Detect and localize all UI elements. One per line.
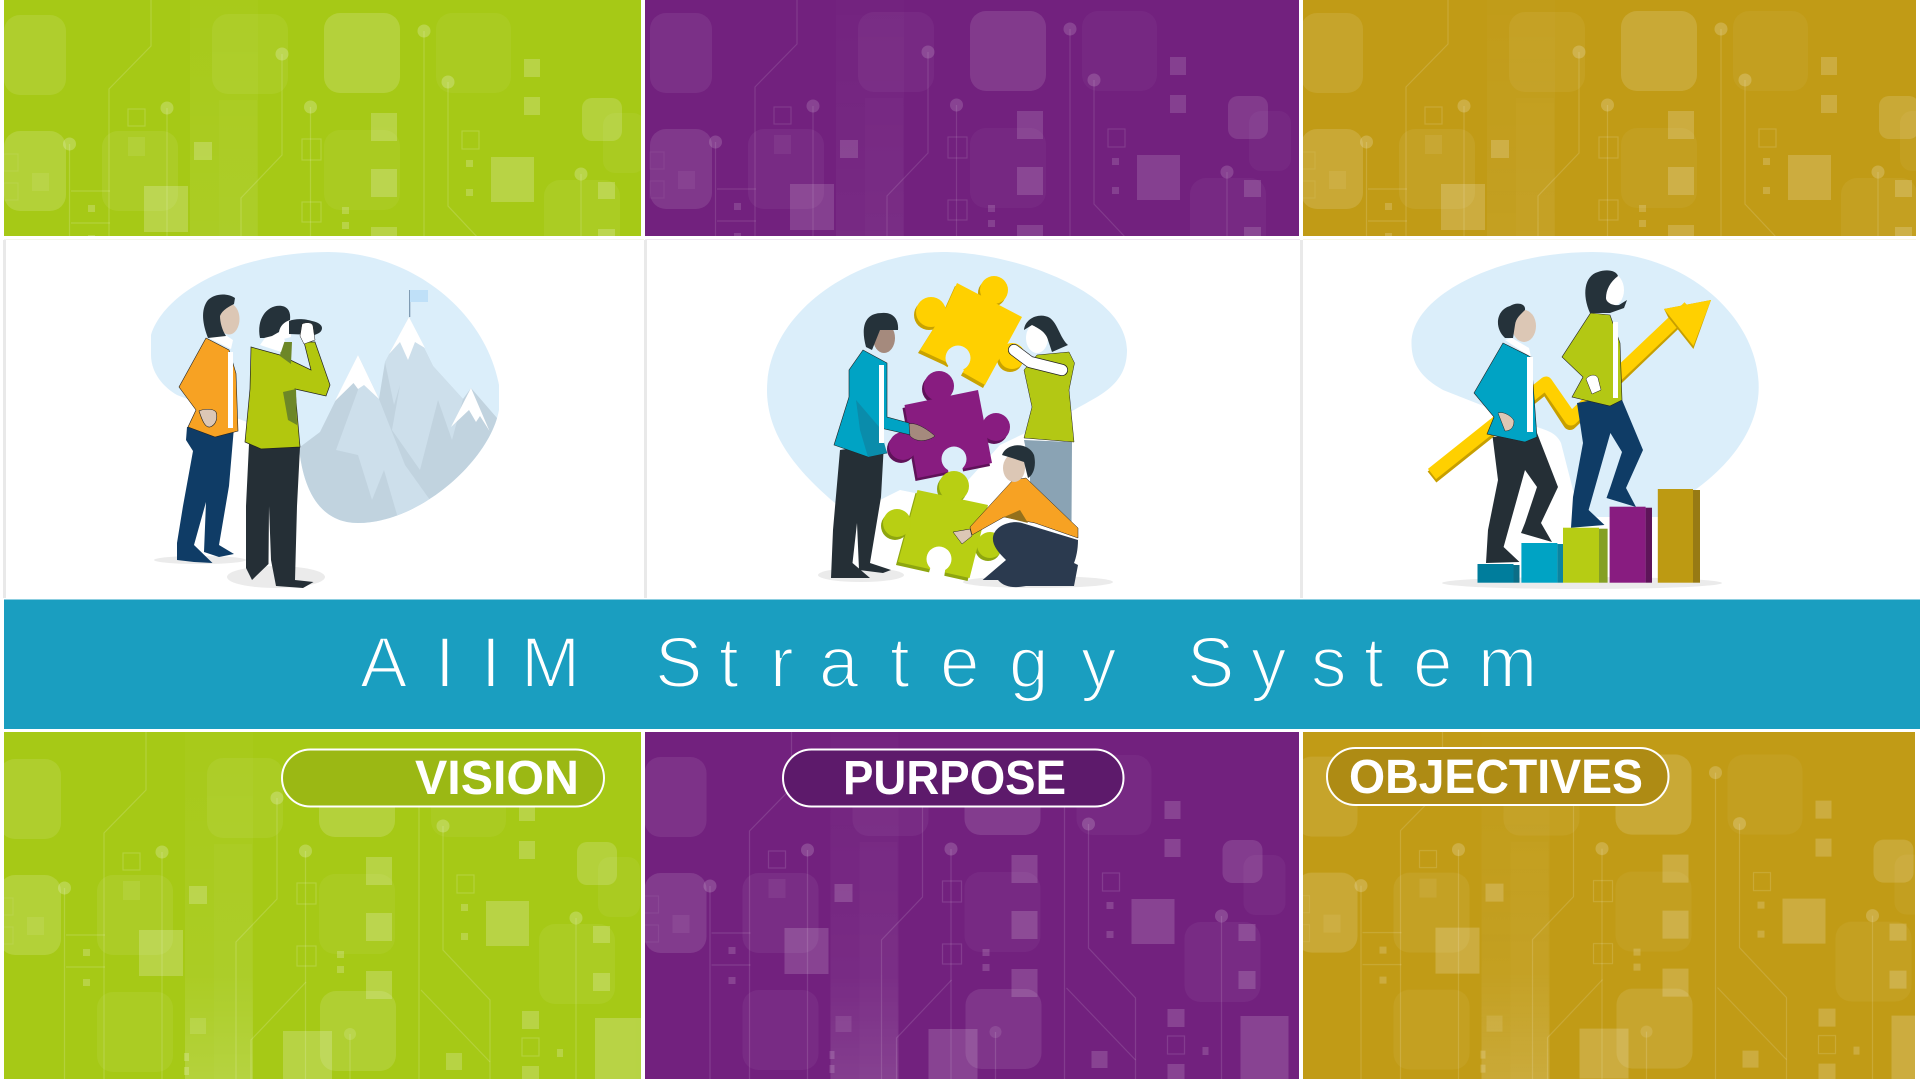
illustration: purpose, team assembling puzzle: [767, 252, 1127, 588]
panel: purpose bottom: [257, 732, 1299, 1079]
label: vision: [282, 750, 604, 806]
puzzle piece purple: [887, 371, 1010, 484]
flag: [409, 290, 428, 317]
shadows: [818, 568, 1113, 588]
puzzle piece green: [881, 471, 1003, 581]
illustration: objectives, climbing bar chart: [1412, 252, 1759, 589]
woman in green top: [1014, 316, 1074, 525]
label: vision: VISION: [415, 752, 579, 805]
panel: objectives top banner: [1303, 0, 1916, 236]
blob background: [767, 252, 1127, 503]
title banner: [4, 600, 1920, 729]
illustration: vision, two people looking at mountains: [151, 252, 500, 588]
puzzle piece yellow: [914, 276, 1025, 388]
panel: vision top banner: [4, 0, 641, 236]
growth arrow: [1432, 300, 1711, 477]
man in teal jacket: [831, 313, 935, 578]
shadow: [1442, 577, 1722, 589]
label: purpose: PURPOSE: [843, 752, 1066, 805]
panel: vision bottom: [4, 732, 641, 1079]
blob background: [151, 252, 499, 523]
label: objectives: OBJECTIVES: [1349, 751, 1643, 804]
man in teal jacket: [1474, 304, 1558, 563]
title: AIIM Strategy System: [360, 624, 1537, 703]
bar chart steps: [1478, 489, 1700, 583]
label: purpose: [783, 750, 1124, 806]
panel: objectives bottom: [1303, 732, 1915, 1079]
panel: purpose top banner: [645, 0, 1299, 236]
shadows: [154, 556, 325, 588]
man with binoculars: [245, 306, 330, 588]
blob background: [1412, 252, 1759, 517]
woman: [177, 294, 240, 563]
crouching man in orange: [953, 445, 1078, 587]
mountains: [300, 342, 497, 523]
illustration frame lines: [3, 239, 1916, 598]
snow caps: [335, 317, 490, 431]
woman in green jacket: [1562, 270, 1643, 528]
